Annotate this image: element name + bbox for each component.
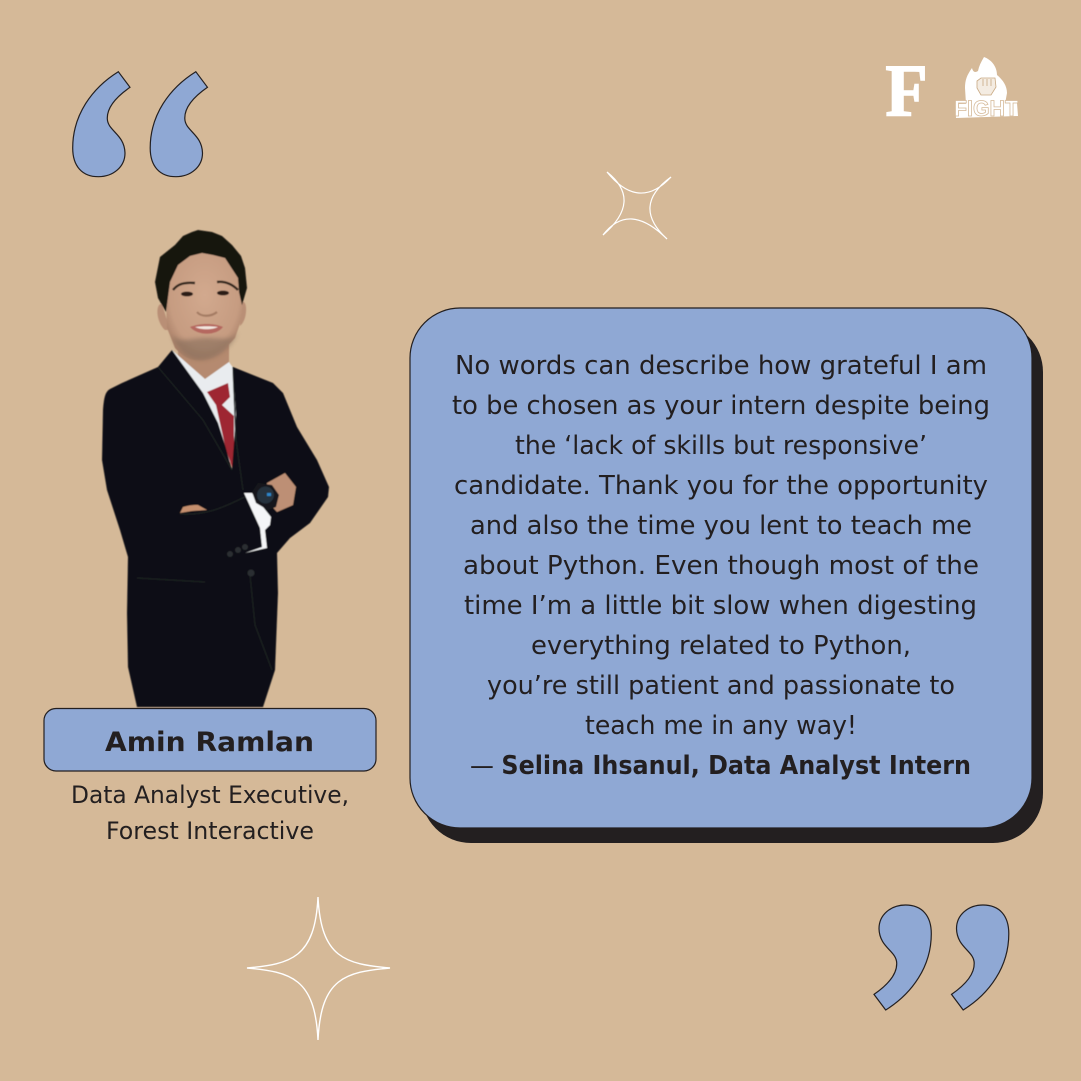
- icon: large four-point sparkle: [247, 897, 390, 1040]
- icon: Forbes F logo: F: [886, 50, 928, 132]
- nose shadow: [197, 312, 217, 316]
- neck: [178, 335, 229, 392]
- testimonial quote text: candidate. Thank you for the opportunity: [454, 471, 988, 501]
- icon: FIGHT flame logo: FIGHT: [954, 96, 1019, 121]
- testimonial quote text: teach me in any way!: [585, 711, 857, 741]
- testimonial quote text: [452, 351, 990, 781]
- buttons: [227, 544, 254, 576]
- eyes: [181, 292, 193, 296]
- shirt cuff: [244, 493, 271, 553]
- testimonial quote text: the ‘lack of skills but responsive’: [515, 431, 927, 461]
- testimonial quote text: — Selina Ihsanul, Data Analyst Intern: [470, 751, 971, 781]
- person name: Amin Ramlan: [105, 727, 314, 758]
- testimonial quote text: No words can describe how grateful I am: [455, 351, 987, 381]
- testimonial quote text: time I’m a little bit slow when digesting: [464, 591, 977, 621]
- hair: [155, 230, 247, 312]
- shirt collar: [172, 350, 236, 470]
- jacket: [102, 350, 329, 707]
- stubble: [172, 332, 238, 360]
- icon: FIGHT flame logo: [954, 57, 1019, 121]
- ears: [157, 302, 246, 330]
- icon: closing quotation mark: [874, 905, 1009, 1010]
- testimonial quote text: to be chosen as your intern despite being: [452, 391, 990, 421]
- tie: [207, 383, 234, 472]
- face: [166, 248, 243, 360]
- card shadow: [421, 322, 1043, 843]
- fist: [264, 473, 296, 512]
- testimonial quote text: about Python. Even though most of the: [463, 551, 979, 581]
- jacket folds: [137, 367, 272, 670]
- eyebrows: [173, 282, 238, 290]
- testimonial quote text: and also the time you lent to teach me: [470, 511, 972, 541]
- icon: opening quotation mark: [73, 72, 208, 177]
- job title and company: [71, 781, 349, 845]
- card body: [410, 308, 1032, 828]
- left hand under arm: [180, 505, 207, 513]
- panel: testimonial card: [410, 308, 1043, 843]
- job title and company: Forest Interactive: [106, 817, 314, 845]
- person portrait: Amin Ramlan: [102, 230, 329, 707]
- icon: small four-point sparkle: [603, 172, 671, 239]
- name plate: [44, 708, 376, 771]
- mouth: [190, 324, 223, 334]
- testimonial quote text: everything related to Python,: [531, 631, 911, 661]
- testimonial quote text: you’re still patient and passionate to: [487, 671, 955, 701]
- wristwatch: [252, 483, 279, 510]
- job title and company: Data Analyst Executive,: [71, 781, 349, 809]
